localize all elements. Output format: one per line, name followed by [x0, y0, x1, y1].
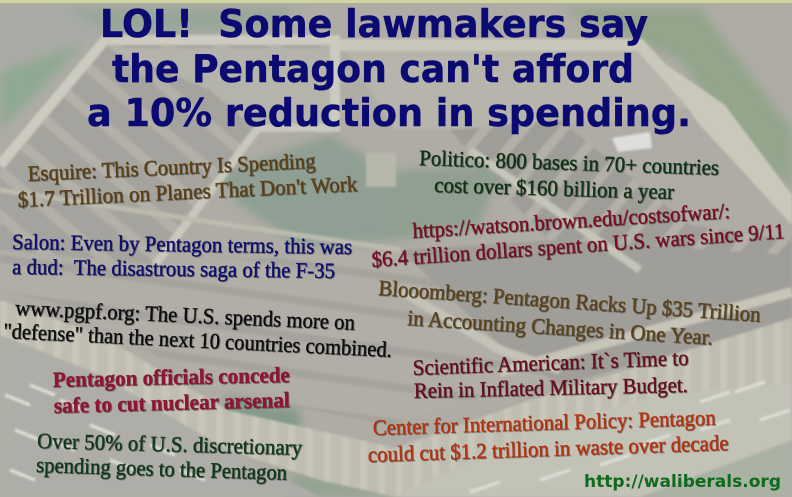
title: the Pentagon can't afford — [112, 47, 634, 91]
headline: Salon — [12, 229, 352, 283]
headline: discretionary spending: spending goes to the Pentagon — [36, 452, 288, 485]
headline: Politico — [419, 145, 719, 204]
headline: costs of war: https://watson.brown.edu/costsofwar/: — [412, 198, 731, 243]
source url: http://waliberals.org — [584, 472, 781, 492]
title: LOL! Some lawmakers say — [100, 2, 648, 46]
headline: Esquire: Esquire: This Country Is Spending — [27, 148, 316, 186]
headline: Salon: Salon: Even by Pentagon terms, this was — [12, 229, 352, 259]
front facade — [0, 300, 396, 497]
headline: Pentagon officials: Pentagon officials concede — [53, 362, 290, 392]
headline: Politico: cost over $160 billion a year — [434, 172, 675, 204]
headline: Center for International Policy — [367, 405, 729, 467]
headline: Pentagon officials — [53, 362, 290, 418]
headline: Pentagon officials: safe to cut nuclear arsenal — [53, 387, 290, 418]
headline: pgpf: "defense" than the next 10 countries combined. — [3, 318, 393, 362]
headline: Esquire — [17, 148, 358, 212]
headline: Center for International Policy: Center for International Policy: Pentagon — [372, 405, 716, 440]
light ring corridors — [0, 40, 335, 165]
headline: Salon: a dud: The disastrous saga of the F-35 — [12, 254, 335, 283]
headline: Center for International Policy: could cut $1.2 trillion in waste over decade — [367, 430, 729, 467]
headline: discretionary spending — [36, 428, 302, 485]
headline: pgpf — [3, 295, 393, 362]
headline: Bloomberg: Blooomberg: Pentagon Racks Up $35 Trillion — [378, 275, 761, 327]
headline: Esquire: $1.7 Trillion on Planes That Don't Work — [17, 171, 358, 212]
title: a 10% reduction in spending. — [87, 91, 691, 135]
headline: Scientific American — [412, 345, 689, 403]
headline: Politico: Politico: 800 bases in 70+ countries — [419, 145, 719, 180]
headline: Scientific American: Scientific American: It`s Time to — [412, 345, 689, 380]
headline: Bloomberg — [378, 275, 761, 350]
title — [87, 2, 691, 135]
roof blocks — [0, 45, 340, 265]
parking lots — [0, 335, 320, 497]
headline: pgpf: www.pgpf.org: The U.S. spends more on — [15, 295, 356, 335]
headline: Scientific American: Rein in Inflated Military Budget. — [414, 372, 688, 403]
headline: discretionary spending: Over 50% of U.S. discretionary — [37, 428, 302, 460]
white building on roof — [612, 132, 652, 152]
headline: Bloomberg: in Accounting Changes in One Year. — [407, 305, 714, 350]
